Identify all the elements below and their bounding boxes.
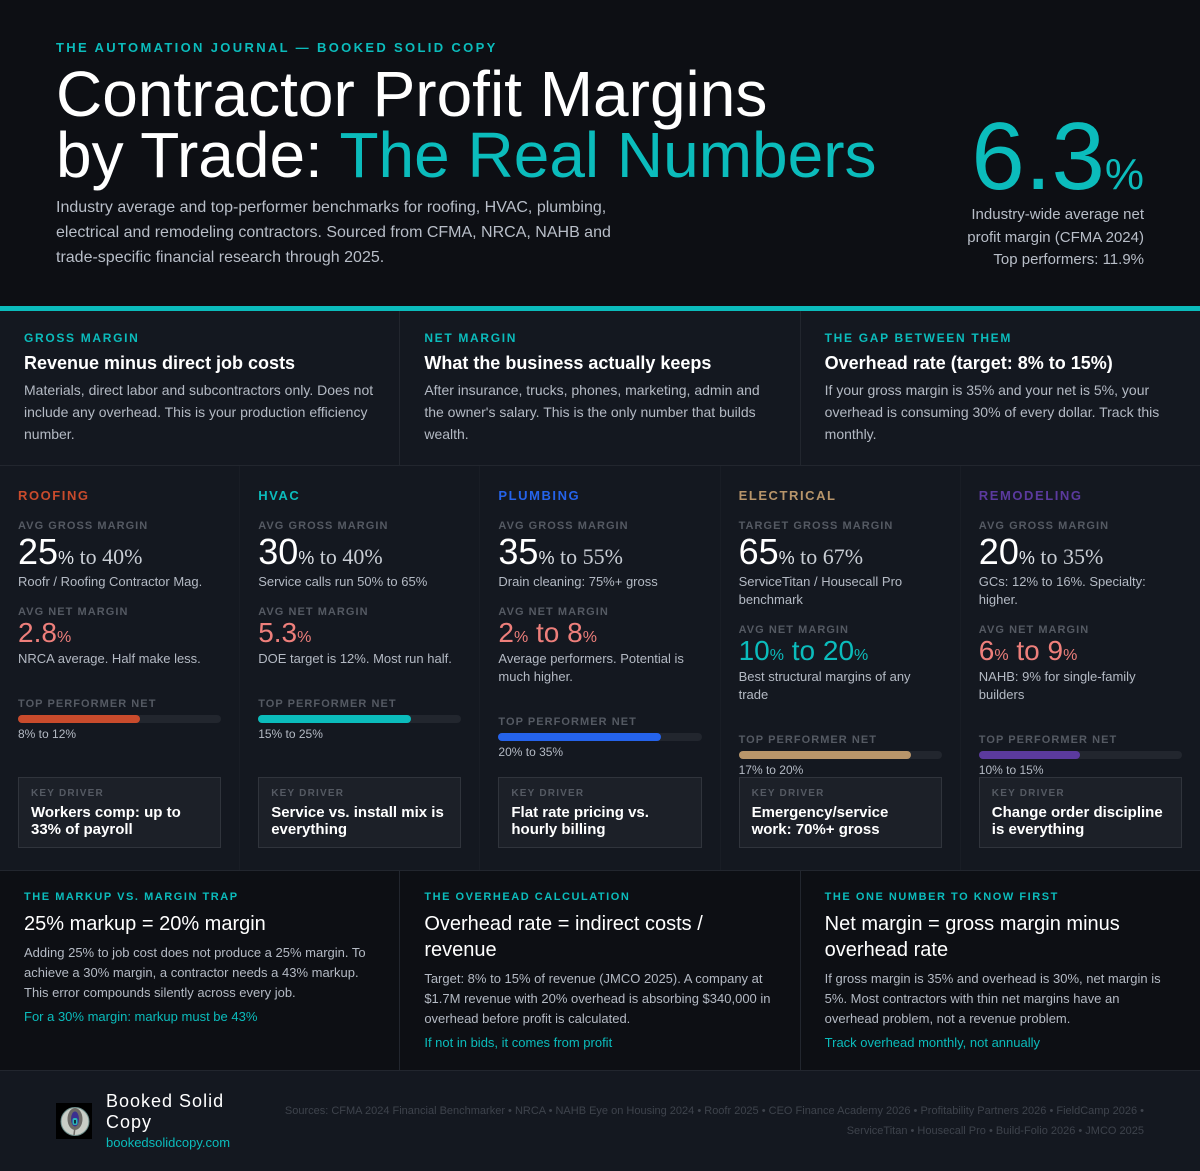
sources: ServiceTitan • Housecall Pro • Build-Folio 2026 • JMCO 2025 xyxy=(847,1125,1144,1137)
label: THE ONE NUMBER TO KNOW FIRST xyxy=(825,891,1059,903)
key driver text: Workers comp: up to xyxy=(31,804,181,821)
trade name: ELECTRICAL xyxy=(739,488,837,503)
key driver text xyxy=(752,804,888,838)
key driver xyxy=(498,777,702,848)
gross value: 35% to 55% xyxy=(498,531,623,572)
panel: electrical xyxy=(721,466,961,870)
heading: What the business actually keeps xyxy=(424,353,711,373)
label: GROSS MARGIN xyxy=(24,331,140,345)
divider above lower panels xyxy=(0,870,1200,871)
key driver label: KEY DRIVER xyxy=(31,788,104,799)
label: THE OVERHEAD CALCULATION xyxy=(424,891,630,903)
trade name: HVAC xyxy=(258,488,300,503)
key driver label: KEY DRIVER xyxy=(992,788,1065,799)
text: If gross margin is 35% and overhead is 30%, net margin is xyxy=(825,971,1161,986)
text xyxy=(424,971,771,1026)
key driver label: KEY DRIVER xyxy=(271,788,344,799)
text xyxy=(424,382,760,442)
text: overhead problem, not a revenue problem. xyxy=(825,1011,1070,1026)
gross note: ServiceTitan / Housecall Pro benchmark xyxy=(739,574,902,607)
label: THE MARKUP VS. MARGIN TRAP xyxy=(24,891,239,903)
gross note: GCs: 12% to 16%. Specialty: higher. xyxy=(979,574,1146,607)
net value: 5.3% xyxy=(258,617,311,648)
progress bar xyxy=(258,715,461,723)
heading xyxy=(424,913,703,961)
net label: AVG NET MARGIN xyxy=(18,606,128,618)
net label: AVG NET MARGIN xyxy=(258,606,369,618)
key driver text: 33% of payroll xyxy=(31,821,133,838)
gross value: 20% to 35% xyxy=(979,531,1103,572)
key driver text: Emergency/service xyxy=(752,804,888,821)
key driver text: Flat rate pricing vs. xyxy=(511,804,649,821)
key driver text: work: 70%+ gross xyxy=(752,821,880,838)
subtitle: Industry average and top-performer benchmarks for roofing, HVAC, plumbing, xyxy=(56,199,606,216)
heading: revenue xyxy=(424,939,497,961)
text: overhead is consuming 30% of every dollar. Track this xyxy=(825,404,1159,420)
progress bar xyxy=(18,715,221,723)
progress bar xyxy=(739,751,942,759)
subtitle: electrical and remodeling contractors. Sourced from CFMA, NRCA, NAHB and xyxy=(56,224,611,241)
callout: For a 30% margin: markup must be 43% xyxy=(24,1009,257,1024)
range: 17% to 20% xyxy=(739,763,803,777)
brand name xyxy=(106,1091,224,1132)
key driver xyxy=(979,777,1182,848)
brand name: Copy xyxy=(106,1112,152,1132)
panel: gross margin definition xyxy=(0,311,400,465)
text: After insurance, trucks, phones, marketing, admin and xyxy=(424,382,760,398)
key driver xyxy=(258,777,461,848)
text xyxy=(825,382,1159,442)
panel: overhead calculation xyxy=(400,871,801,1070)
text: number. xyxy=(24,426,75,442)
gross note: Service calls run 50% to 65% xyxy=(258,574,427,589)
range: 20% to 35% xyxy=(498,745,563,759)
footer xyxy=(0,1070,1200,1171)
net note: NRCA average. Half make less. xyxy=(18,651,201,666)
net value: 2% to 8% xyxy=(498,617,597,648)
panel: overhead gap definition xyxy=(801,311,1200,465)
text: If your gross margin is 35% and your net is 5%, your xyxy=(825,382,1149,398)
text: monthly. xyxy=(825,426,877,442)
text: the owner's salary. This is the only number that builds xyxy=(424,404,756,420)
net label: AVG NET MARGIN xyxy=(979,624,1089,636)
icon: peacock feather logo xyxy=(56,1103,92,1139)
text: Adding 25% to job cost does not produce a 25% margin. To xyxy=(24,945,366,960)
net label: AVG NET MARGIN xyxy=(498,606,609,618)
key driver label: KEY DRIVER xyxy=(511,788,584,799)
panel: hvac xyxy=(240,466,480,870)
label: NET MARGIN xyxy=(424,331,517,345)
key driver text xyxy=(271,804,444,838)
top performer label: TOP PERFORMER NET xyxy=(739,734,877,746)
progress bar xyxy=(979,751,1182,759)
text xyxy=(24,945,366,1000)
key driver text: is everything xyxy=(992,821,1084,838)
range: 15% to 25% xyxy=(258,727,323,741)
text: 5%. Most contractors with thin net margins have an xyxy=(825,991,1119,1006)
heading: Revenue minus direct job costs xyxy=(24,353,295,373)
key driver text xyxy=(511,804,649,838)
subtitle: trade-specific financial research through 2025. xyxy=(56,249,384,266)
headline stat caption: Industry-wide average net xyxy=(971,206,1144,223)
key driver text: everything xyxy=(271,821,347,838)
trade name: PLUMBING xyxy=(498,488,580,503)
heading: Overhead rate (target: 8% to 15%) xyxy=(825,353,1113,373)
net note: NAHB: 9% for single-family builders xyxy=(979,669,1136,702)
title xyxy=(56,58,877,191)
panel: plumbing xyxy=(480,466,721,870)
gross label: AVG GROSS MARGIN xyxy=(979,520,1109,532)
panel: remodeling xyxy=(961,466,1200,870)
key driver xyxy=(739,777,942,848)
gross label: AVG GROSS MARGIN xyxy=(498,520,629,532)
heading: Overhead rate = indirect costs / xyxy=(424,913,703,935)
heading: Net margin = gross margin minus xyxy=(825,913,1120,935)
headline stat: 6.3%: 6.3% xyxy=(971,103,1144,210)
net note: Best structural margins of any trade xyxy=(739,669,911,702)
progress bar xyxy=(498,733,702,741)
eyebrow: THE AUTOMATION JOURNAL — BOOKED SOLID COPY xyxy=(56,40,498,55)
title: by Trade: The Real Numbers xyxy=(56,119,877,191)
gross label: AVG GROSS MARGIN xyxy=(258,520,388,532)
brand url: bookedsolidcopy.com xyxy=(106,1135,230,1150)
label: THE GAP BETWEEN THEM xyxy=(825,331,1012,345)
gross value: 25% to 40% xyxy=(18,531,143,572)
headline stat caption xyxy=(967,206,1144,268)
brand name: Booked Solid xyxy=(106,1091,224,1111)
top performer label: TOP PERFORMER NET xyxy=(498,716,637,728)
heading xyxy=(825,913,1120,961)
sources: Sources: CFMA 2024 Financial Benchmarker • NRCA • NAHB Eye on Housing 2024 • Roofr 2025 • CEO Finance Academy 2026 • Profitability Partners 2026 • FieldCamp 2026 • xyxy=(285,1105,1144,1117)
callout: Track overhead monthly, not annually xyxy=(825,1035,1040,1050)
text: wealth. xyxy=(424,426,469,442)
key driver xyxy=(18,777,221,848)
key driver text: hourly billing xyxy=(511,821,606,838)
subtitle xyxy=(56,199,611,266)
text: achieve a 30% margin, a contractor needs a 43% markup. xyxy=(24,965,359,980)
panel: one number xyxy=(801,871,1200,1070)
heading: 25% markup = 20% margin xyxy=(24,913,266,935)
title: Contractor Profit Margins xyxy=(56,58,767,130)
text: include any overhead. This is your production efficiency xyxy=(24,404,367,420)
net label: AVG NET MARGIN xyxy=(739,624,849,636)
net note: DOE target is 12%. Most run half. xyxy=(258,651,452,666)
headline stat caption: profit margin (CFMA 2024) xyxy=(967,228,1144,246)
panel: markup vs margin xyxy=(0,871,400,1070)
text: Target: 8% to 15% of revenue (JMCO 2025). A company at xyxy=(424,971,763,986)
panel: net margin definition xyxy=(400,311,801,465)
gross label: TARGET GROSS MARGIN xyxy=(739,520,893,532)
key driver text: Change order discipline xyxy=(992,804,1163,821)
text: overhead before profit is calculated. xyxy=(424,1011,630,1026)
headline stat caption: Top performers: 11.9% xyxy=(993,251,1144,268)
key driver label: KEY DRIVER xyxy=(752,788,825,799)
trade name: REMODELING xyxy=(979,488,1083,503)
panel: roofing xyxy=(0,466,240,870)
trade name: ROOFING xyxy=(18,488,90,503)
divider band above trades xyxy=(0,465,1200,466)
text xyxy=(24,382,374,442)
top performer label: TOP PERFORMER NET xyxy=(18,698,156,710)
gross note: Drain cleaning: 75%+ gross xyxy=(498,574,658,589)
top performer label: TOP PERFORMER NET xyxy=(979,734,1117,746)
callout: If not in bids, it comes from profit xyxy=(424,1035,612,1050)
range: 10% to 15% xyxy=(979,763,1044,777)
net value: 6% to 9% xyxy=(979,635,1077,666)
gross label: AVG GROSS MARGIN xyxy=(18,520,148,532)
text: $1.7M revenue with 20% overhead is absorbing $340,000 in xyxy=(424,991,771,1006)
text: This error compounds silently across every job. xyxy=(24,985,296,1000)
text: Materials, direct labor and subcontractors only. Does not xyxy=(24,382,373,398)
net value: 2.8% xyxy=(18,617,71,648)
net value: 10% to 20% xyxy=(739,635,868,666)
sources xyxy=(285,1105,1144,1137)
net note: Average performers. Potential is much higher. xyxy=(498,651,684,684)
text xyxy=(825,971,1161,1026)
key driver text xyxy=(992,804,1163,838)
range: 8% to 12% xyxy=(18,727,76,741)
top performer label: TOP PERFORMER NET xyxy=(258,698,397,710)
header band xyxy=(0,0,1200,311)
key driver text xyxy=(31,804,181,838)
gross note: Roofr / Roofing Contractor Mag. xyxy=(18,574,202,589)
gross value: 30% to 40% xyxy=(258,531,383,572)
heading: overhead rate xyxy=(825,939,948,961)
key driver text: Service vs. install mix is xyxy=(271,804,444,821)
gross value: 65% to 67% xyxy=(739,531,863,572)
